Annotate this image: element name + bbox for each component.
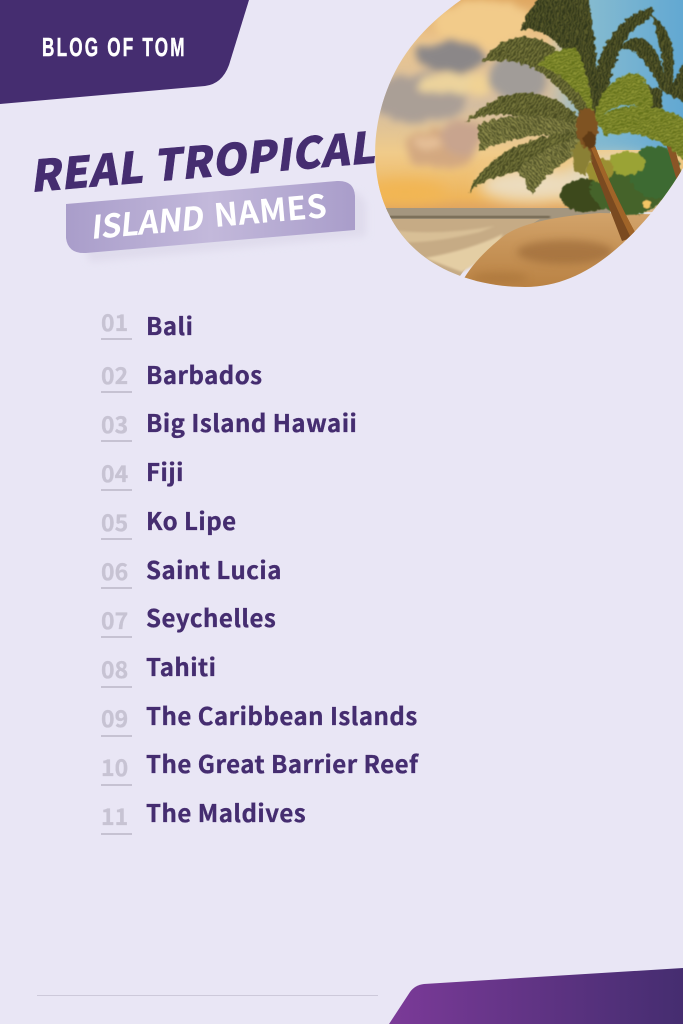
item 07: 07 <box>101 602 128 636</box>
item 06 <box>101 551 282 589</box>
clouds <box>368 0 550 168</box>
header tab <box>0 0 249 104</box>
item 11 <box>101 794 306 835</box>
photo: tropical beach with palm trees <box>363 0 683 290</box>
item 05: 05 <box>101 504 128 538</box>
main palm fronds <box>465 0 683 194</box>
item 03: Big Island Hawaii <box>146 404 357 439</box>
item 11: 11 <box>101 798 128 832</box>
item 02 <box>101 356 263 393</box>
item 11: The Maldives <box>146 794 306 829</box>
item 07 <box>101 599 276 638</box>
sea <box>370 208 610 230</box>
brand label: BLOG OF TOM <box>42 32 185 62</box>
item 04: Fiji <box>146 453 184 488</box>
item 05 <box>101 502 237 540</box>
second palm <box>666 145 681 179</box>
subtitle banner <box>66 181 366 262</box>
item 04 <box>101 453 184 491</box>
subtitle word: island: ISLAND <box>90 193 207 249</box>
item 03: 03 <box>101 406 128 440</box>
item 01: Bali <box>146 307 193 342</box>
item 05: Ko Lipe <box>146 502 237 537</box>
background trees <box>560 146 681 215</box>
item 08: 08 <box>101 651 128 685</box>
item 08: Tahiti <box>146 648 216 683</box>
main palm trunk <box>586 146 637 241</box>
subtitle word: names: NAMES <box>212 181 328 237</box>
island list <box>101 304 419 835</box>
item 06: Saint Lucia <box>146 551 282 586</box>
item 02: Barbados <box>146 356 263 391</box>
item 06: 06 <box>101 553 128 587</box>
item 10: The Great Barrier Reef <box>146 745 419 780</box>
item 10: 10 <box>101 749 128 783</box>
item 09: The Caribbean Islands <box>146 697 418 732</box>
sand <box>464 213 650 287</box>
item 02: 02 <box>101 357 128 391</box>
item 09: 09 <box>101 700 128 734</box>
item 04: 04 <box>101 455 128 489</box>
item 08 <box>101 648 216 688</box>
item 01 <box>101 304 193 342</box>
item 07: Seychelles <box>146 599 276 634</box>
title: real tropical: REAL TROPICAL <box>29 113 382 205</box>
item 01: 01 <box>101 304 128 338</box>
footer tab <box>389 968 683 1024</box>
